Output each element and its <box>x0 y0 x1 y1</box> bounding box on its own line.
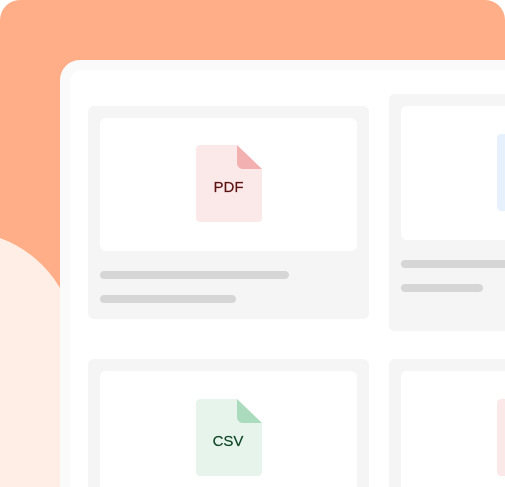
icon: CSV document: CSV <box>213 433 243 450</box>
icon: red document <box>497 399 505 476</box>
icon: PDF document <box>196 145 262 222</box>
icon: blue document <box>497 134 505 211</box>
card: CSV file <box>88 359 369 487</box>
text placeholder lines <box>100 271 289 303</box>
pale peach blob <box>0 238 60 487</box>
icon: CSV document <box>196 399 262 476</box>
main white window <box>60 60 505 487</box>
card: PDF file <box>88 106 369 319</box>
text placeholder lines <box>401 260 505 292</box>
icon: PDF document: PDF <box>214 179 244 196</box>
card: red file, cropped <box>389 359 505 487</box>
card: blue file, cropped <box>389 94 505 331</box>
